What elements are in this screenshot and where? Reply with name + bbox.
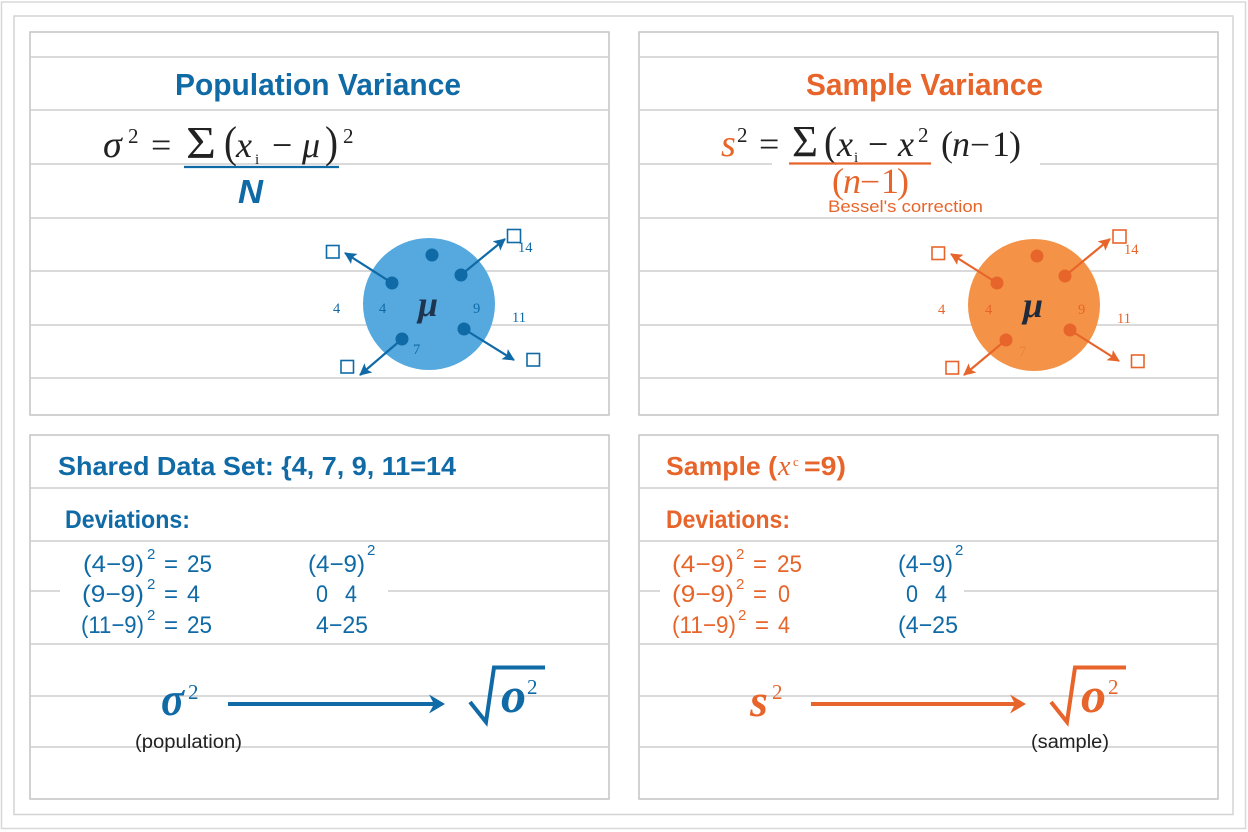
- sample variance formula: (: [941, 124, 953, 164]
- deviation calculations: [81, 542, 375, 639]
- sample variance formula: s: [721, 123, 736, 165]
- panel: sample data set: [639, 435, 1218, 799]
- square root of variance: 2: [527, 675, 538, 699]
- deviation calculations: 2: [736, 576, 744, 593]
- square root of variance: [1051, 667, 1126, 723]
- deviation calculations: 0: [906, 581, 918, 608]
- sample variance formula: =: [759, 124, 779, 164]
- population variance formula: −: [272, 125, 292, 165]
- deviation calculations: 4: [345, 581, 357, 608]
- deviation calculations: 25: [777, 551, 802, 578]
- heading: sample mean: =9): [804, 451, 846, 481]
- diagram: population deviations from mean: 7: [413, 342, 420, 358]
- deviation calculations: 4−25: [316, 612, 368, 639]
- deviation calculations: =: [164, 551, 178, 578]
- diagram: population deviations from mean: 4: [379, 301, 387, 317]
- population variance formula: N: [238, 173, 264, 210]
- deviation calculations: 0: [778, 581, 790, 608]
- heading: sample variance: Sample Variance: [806, 67, 1043, 102]
- diagram: population deviations from mean: [326, 230, 540, 375]
- deviation calculations: 2: [736, 546, 744, 563]
- deviation calculations: 4: [935, 581, 947, 608]
- sample variance formula: ): [1009, 124, 1021, 164]
- deviation calculations: =: [753, 581, 767, 608]
- sample variance formula: 2: [737, 123, 748, 147]
- diagram: sample deviations from mean: μ: [1021, 285, 1043, 325]
- sample variance formula: Σ: [792, 117, 818, 166]
- deviation calculations: 4: [187, 581, 200, 608]
- deviation calculations: (4−9): [83, 551, 144, 578]
- sample variance formula: n: [952, 124, 970, 164]
- sample variance formula: −: [970, 127, 990, 164]
- diagram: sample deviations from mean: 9: [1078, 302, 1085, 318]
- heading: sample mean: c: [793, 454, 799, 469]
- population variance to standard deviation: (population): [135, 732, 242, 753]
- population variance to standard deviation: 2: [188, 680, 198, 704]
- diagram: sample deviations from mean: 14: [1124, 242, 1139, 258]
- population variance formula: 2: [128, 124, 138, 148]
- sample variance formula: ): [897, 161, 909, 201]
- deviation calculations: 25: [187, 551, 212, 578]
- sample variance formula: 1: [992, 124, 1010, 164]
- diagram: population deviations from mean: 9: [473, 301, 480, 317]
- deviation calculations: [672, 542, 963, 639]
- population variance formula: =: [151, 125, 171, 165]
- population variance formula: i: [255, 152, 259, 168]
- deviation calculations: (4−25: [898, 612, 958, 639]
- sample variance formula: [721, 117, 1021, 216]
- diagram: population deviations from mean: 11: [512, 310, 526, 326]
- deviation calculations: (9−9): [672, 581, 734, 608]
- population variance formula: σ: [103, 124, 123, 166]
- deviation calculations: 25: [187, 612, 212, 639]
- deviation calculations: 2: [147, 546, 155, 563]
- panel: population variance: [30, 32, 609, 415]
- square root of variance: o: [1081, 667, 1106, 723]
- deviation calculations: (4−9): [898, 551, 953, 578]
- population variance formula: x: [235, 125, 252, 165]
- square root of variance: [470, 667, 545, 723]
- diagram: population deviations from mean: μ: [416, 284, 438, 324]
- sample variance formula: x: [897, 124, 914, 164]
- sample variance to standard deviation: [749, 667, 1126, 753]
- deviation calculations: 0: [316, 581, 328, 608]
- sample variance to standard deviation: (sample): [1031, 732, 1109, 753]
- deviation calculations: =: [164, 581, 178, 608]
- sample variance formula: x: [836, 124, 853, 164]
- heading: shared data set: Shared Data Set: {4, 7, 9, 11=14: [58, 451, 457, 481]
- subheading: deviations: Deviations:: [666, 506, 790, 534]
- diagram: sample deviations from mean: 11: [1117, 311, 1131, 327]
- heading: population variance: Population Variance: [175, 67, 461, 102]
- square root of variance: o: [501, 667, 526, 723]
- sample variance formula: −: [860, 164, 880, 201]
- diagram: sample deviations from mean: 7: [1019, 344, 1026, 360]
- arrow: square root: [228, 694, 445, 714]
- heading: sample mean: Sample (: [666, 451, 777, 481]
- deviation calculations: =: [753, 551, 767, 578]
- deviation calculations: (4−9): [308, 551, 365, 578]
- population variance formula: μ: [301, 125, 320, 165]
- population variance formula: Σ: [186, 117, 216, 168]
- population variance formula: 2: [343, 124, 354, 148]
- sample variance formula: n: [843, 161, 861, 201]
- deviation calculations: 4: [778, 612, 790, 639]
- deviation calculations: (11−9): [672, 612, 736, 639]
- panel: shared data set: [30, 435, 609, 799]
- subheading: deviations: Deviations:: [65, 506, 190, 534]
- deviation calculations: (11−9): [81, 612, 144, 639]
- sample variance formula: 2: [918, 123, 928, 147]
- sample variance formula: i: [854, 150, 858, 166]
- deviation calculations: 2: [147, 607, 155, 624]
- diagram: population deviations from mean: 4: [333, 301, 341, 317]
- diagram: sample deviations from mean: [932, 230, 1144, 375]
- population variance to standard deviation: σ: [161, 673, 185, 726]
- diagram: population deviations from mean: 14: [518, 240, 533, 256]
- sample variance formula: −: [868, 124, 888, 164]
- deviation calculations: 2: [147, 576, 155, 593]
- sample variance formula: (: [824, 120, 837, 166]
- population variance formula: (: [224, 118, 237, 167]
- caption: Bessel's correction: Bessel's correction: [828, 197, 983, 216]
- deviation calculations: =: [755, 612, 769, 639]
- diagram: sample deviations from mean: 4: [985, 302, 993, 318]
- arrow: square root: [811, 694, 1026, 714]
- diagram: sample deviations from mean: 4: [938, 302, 946, 318]
- deviation calculations: 2: [955, 542, 963, 559]
- square root of variance: 2: [1108, 675, 1118, 699]
- sample variance formula: 1: [881, 161, 899, 201]
- heading: sample mean: [666, 451, 846, 482]
- deviation calculations: 2: [738, 607, 746, 624]
- deviation calculations: =: [164, 612, 178, 639]
- deviation calculations: (9−9): [82, 581, 144, 608]
- population variance formula: [103, 117, 354, 210]
- deviation calculations: (4−9): [672, 551, 734, 578]
- heading: sample mean: x: [777, 451, 791, 482]
- sample variance formula: (: [832, 161, 844, 201]
- sample variance to standard deviation: s: [749, 675, 768, 726]
- panel: sample variance: [639, 32, 1218, 415]
- population variance formula: ): [325, 118, 338, 167]
- sample variance to standard deviation: 2: [772, 680, 782, 704]
- population variance to standard deviation: [135, 667, 545, 753]
- deviation calculations: 2: [367, 542, 375, 559]
